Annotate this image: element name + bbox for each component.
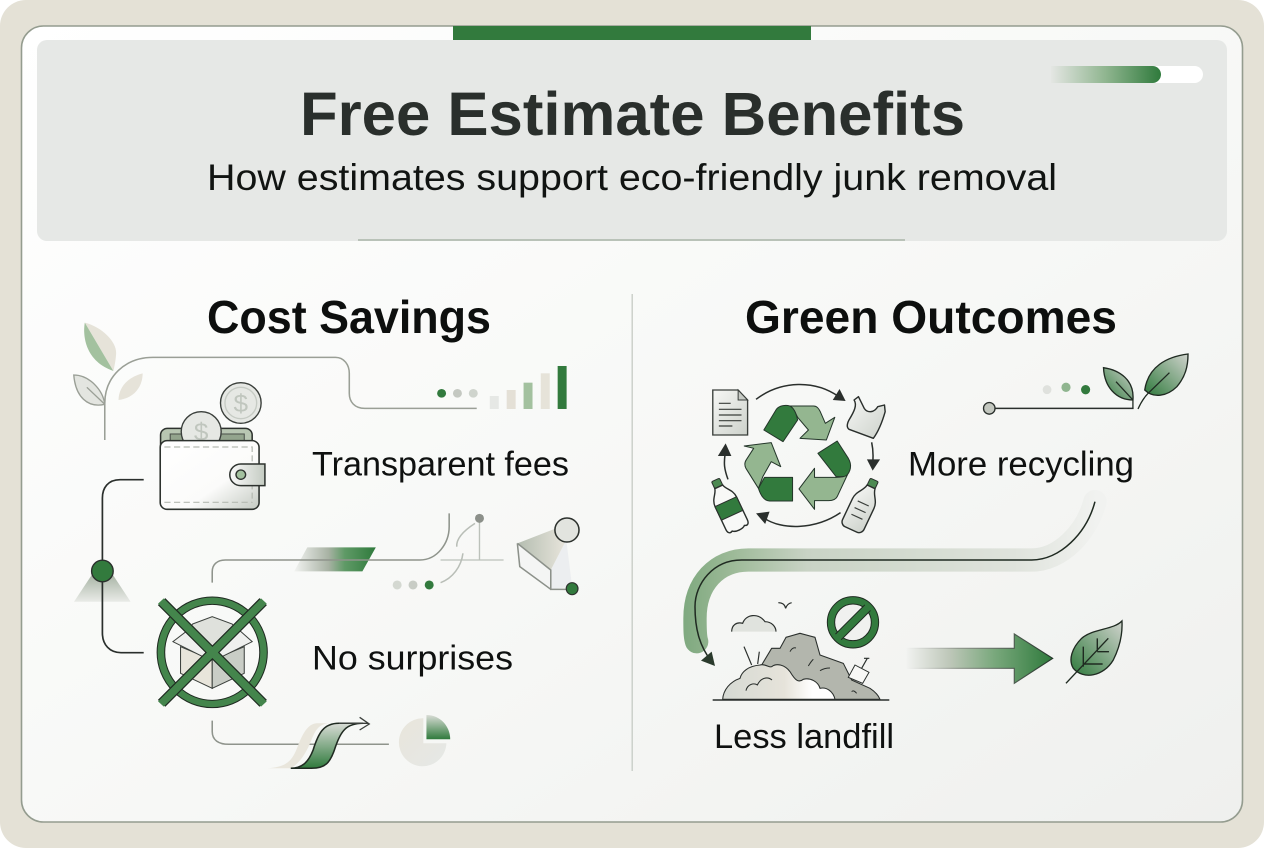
icon: paper document — [713, 390, 748, 435]
panel: cost savings — [74, 291, 579, 768]
panel: green outcomes — [695, 291, 1188, 756]
cloud — [732, 616, 776, 632]
icon: green leaf — [1066, 621, 1122, 683]
icon: landfill mound — [713, 603, 889, 700]
upper connector with gradient parallelogram — [212, 513, 449, 583]
heading: cost savings: Cost Savings — [207, 291, 491, 343]
icon: wallet with coins: $ — [234, 390, 248, 418]
recycling symbol — [744, 405, 851, 509]
arrow to leaf — [907, 634, 1053, 683]
lower connector with s-curve arrow — [212, 717, 389, 768]
pie chart — [399, 715, 450, 766]
upper left artwork — [74, 323, 567, 509]
curved flow arrow — [695, 502, 1095, 666]
small diagram: axes, dot and curve — [393, 514, 504, 589]
line with dots and leaves — [984, 354, 1188, 414]
icon: sprout with connector line — [74, 323, 477, 440]
subtitle: How estimates support eco-friendly junk removal — [207, 157, 1057, 198]
label: transparent fees: Transparent fees — [312, 446, 569, 484]
icon: wallet with coins — [160, 383, 265, 509]
icon: prohibition sign — [827, 597, 879, 648]
icon: labelled bottle — [705, 475, 750, 535]
header progress pill — [1051, 66, 1203, 83]
connector with node — [74, 480, 144, 653]
cycle arrows — [718, 384, 880, 526]
lower right artwork — [695, 502, 1122, 700]
center divider — [632, 294, 633, 771]
label: more recycling: More recycling — [908, 446, 1134, 484]
label: no surprises: No surprises — [312, 640, 513, 678]
icon: recycling loop — [705, 384, 885, 535]
icon: prism with circles — [517, 518, 579, 595]
icon: wallet with coins: $ — [194, 419, 208, 447]
bird — [778, 603, 792, 608]
bar chart with dots — [437, 366, 567, 409]
lower left artwork — [161, 513, 579, 768]
icon: plastic bag — [847, 397, 885, 438]
heading: green outcomes: Green Outcomes — [745, 291, 1117, 343]
label: less landfill: Less landfill — [714, 718, 894, 756]
header panel — [37, 40, 1227, 241]
icon: crossed-out box — [161, 601, 264, 704]
header underline — [358, 239, 905, 241]
icon: clear bottle — [840, 475, 885, 534]
top green accent bar — [453, 26, 811, 40]
upper right artwork — [705, 354, 1188, 535]
title: Free Estimate Benefits — [300, 80, 965, 148]
